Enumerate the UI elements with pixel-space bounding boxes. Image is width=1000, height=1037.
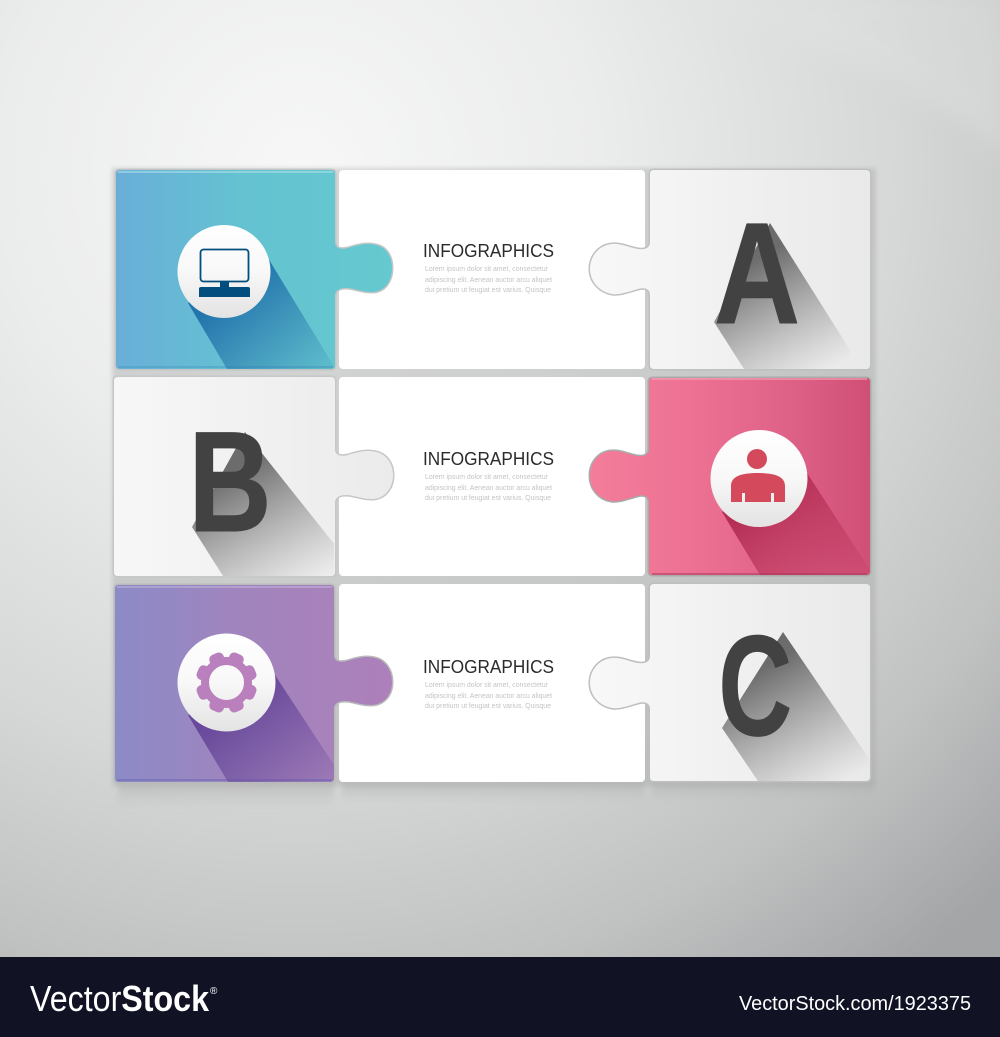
- panel: blue computer piece: [116, 170, 392, 369]
- text block: row 3: dui pretium ut feugiat est varius. Quisque: [425, 703, 551, 710]
- logo: registered mark: ®: [210, 986, 218, 997]
- icon: person: [710, 430, 808, 527]
- icon: gear: [178, 634, 276, 732]
- panel: letter A piece: [590, 170, 870, 369]
- panel: purple gear piece: [115, 585, 392, 782]
- panel: row 3 middle: [339, 584, 645, 782]
- icon: computer: [178, 225, 270, 318]
- panel: pink person piece: [590, 378, 870, 575]
- long shadow: A: [714, 223, 850, 369]
- text block: row 2: Lorem ipsum dolor sit amet, consectetur: [425, 474, 549, 481]
- panel: letter C piece: [590, 584, 870, 781]
- text block: row 3: adipiscing elit. Aenean auctor arcu aliquet: [425, 693, 552, 700]
- letter C: C: [718, 607, 792, 766]
- panel: row 1 middle: [339, 170, 645, 369]
- text block: row 1: dui pretium ut feugiat est varius. Quisque: [425, 287, 551, 294]
- heading: row 1: INFOGRAPHICS: [423, 240, 554, 261]
- heading: row 2: INFOGRAPHICS: [423, 448, 554, 469]
- footer: image id: VectorStock.com/1923375: [739, 993, 971, 1015]
- text block: row 2: dui pretium ut feugiat est varius. Quisque: [425, 495, 551, 502]
- panel: letter B piece: [114, 377, 393, 576]
- heading: row 3: INFOGRAPHICS: [423, 656, 554, 677]
- drop shadows behind the puzzle: [112, 168, 876, 810]
- text block: row 2: adipiscing elit. Aenean auctor arcu aliquet: [425, 485, 552, 492]
- letter B: B: [188, 403, 272, 562]
- long shadow: C: [722, 632, 870, 781]
- footer bar: [0, 957, 1000, 1037]
- long shadow: blue: [188, 258, 335, 369]
- text block: row 1: adipiscing elit. Aenean auctor arcu aliquet: [425, 277, 552, 284]
- letter A: A: [714, 193, 800, 354]
- logo: VectorStock: VectorStock: [30, 978, 210, 1019]
- long shadow: pink: [722, 473, 870, 575]
- text block: row 3: Lorem ipsum dolor sit amet, consectetur: [425, 682, 549, 689]
- long shadow: purple: [188, 672, 334, 782]
- long shadow: B: [192, 432, 335, 576]
- text block: row 1: Lorem ipsum dolor sit amet, consectetur: [425, 266, 549, 273]
- panel: row 2 middle: [339, 377, 645, 576]
